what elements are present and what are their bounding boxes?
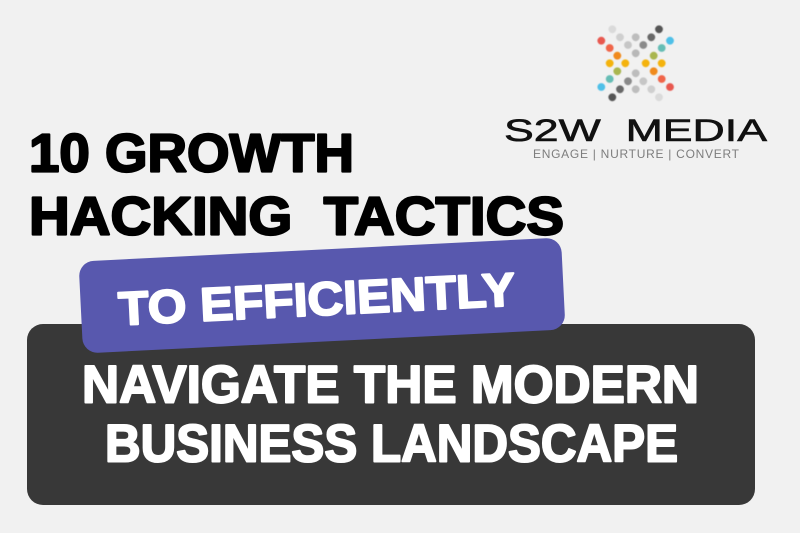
logo tagline: ENGAGE | NURTURE | CONVERT xyxy=(533,147,740,161)
panel heading: NAVIGATE THE MODERN xyxy=(82,356,699,414)
logo wordmark: S2W MEDIA xyxy=(504,112,767,148)
panel heading xyxy=(82,356,699,474)
banner text: TO EFFICIENTLY xyxy=(117,262,516,335)
purple tilted banner xyxy=(79,238,566,353)
title: 10 growth hacking tactics: HACKING TACTICS xyxy=(29,186,564,246)
dark panel xyxy=(27,324,755,505)
title: 10 growth hacking tactics xyxy=(29,124,564,246)
icon: dotted X mark xyxy=(597,25,674,101)
logo: S2W Media xyxy=(504,25,767,161)
panel heading: BUSINESS LANDSCAPE xyxy=(105,414,678,474)
title: 10 growth hacking tactics: 10 GROWTH xyxy=(29,124,354,184)
